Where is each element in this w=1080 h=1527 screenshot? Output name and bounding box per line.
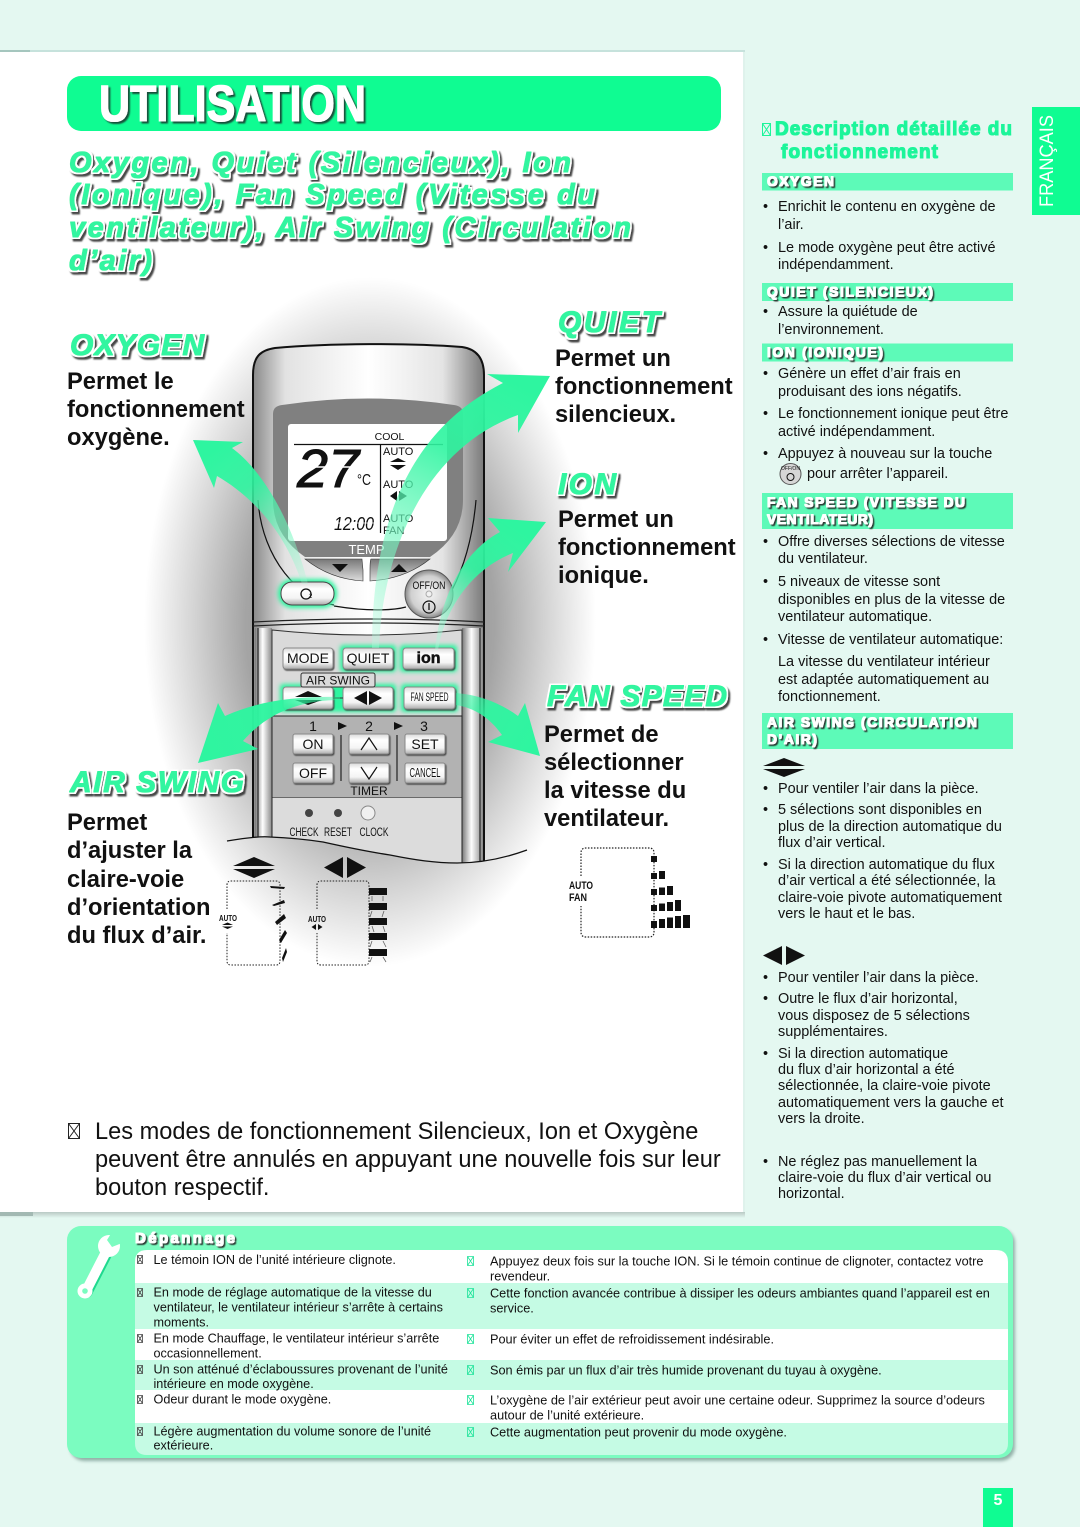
section: ion: Génère un effet d’air frais en <box>778 366 961 382</box>
timer panel: CANCEL <box>410 766 441 780</box>
heading: detailed description <box>762 119 1012 163</box>
text: oxygen description <box>67 369 245 451</box>
section: fan speed <box>762 493 1013 705</box>
section: oxygen: indépendamment. <box>778 257 894 273</box>
remote control illustration: FAN SPEED <box>410 690 449 704</box>
heading: feature list: ventilateur), Air Swing (Circulation <box>69 212 631 244</box>
note: cancel modes: peuvent être annulés en appuyant une nouvelle fois sur leur <box>95 1147 721 1173</box>
section: air swing: • <box>763 1154 768 1170</box>
section: ion: activé indépendamment. <box>778 424 935 440</box>
lower remote panel: RESET <box>324 827 352 839</box>
markers <box>138 1256 142 1436</box>
icon: fan speed diagram <box>569 848 690 937</box>
section: oxygen: Enrichit le contenu en oxygène de <box>778 199 996 215</box>
section: air swing: supplémentaires. <box>778 1024 888 1040</box>
heading: quiet: QUIET <box>558 306 663 339</box>
icon: off/on button: OFF/ON <box>781 466 800 472</box>
heading: feature list: (Ionique), Fan Speed (Vitesse du <box>69 179 595 211</box>
remote display: 27 <box>296 439 361 499</box>
temperature buttons <box>305 559 430 581</box>
note: cancel modes: Les modes de fonctionnement Silencieux, Ion et Oxygène <box>95 1119 698 1145</box>
section: quiet: l’environnement. <box>778 322 884 338</box>
heading: detailed description: fonctionnement <box>781 142 939 163</box>
icon: vertical swing diagram: AUTO <box>219 913 237 923</box>
title banner <box>67 75 721 132</box>
section: fan speed: fonctionnement. <box>778 689 881 705</box>
troubleshooting explanations <box>490 1254 990 1440</box>
timer panel <box>272 716 462 798</box>
section: oxygen: • <box>763 240 768 256</box>
arrow: fan speed <box>456 693 540 756</box>
section: air swing: du flux d’air horizontal a été <box>778 1062 955 1078</box>
remote display: TEMP <box>348 542 385 557</box>
troubleshooting symptoms <box>154 1253 448 1452</box>
text: fan speed description: la vitesse du <box>544 778 686 804</box>
section: air swing: flux d’air vertical. <box>778 835 886 851</box>
text: quiet description: silencieux. <box>555 402 676 428</box>
timer panel: 3 <box>420 718 428 734</box>
function buttons <box>283 648 455 709</box>
section: fan speed: • <box>763 632 768 648</box>
section: ion: Le fonctionnement ionique peut être <box>778 406 1008 422</box>
section: ion: • <box>763 446 768 462</box>
section: quiet <box>762 283 1013 338</box>
page number <box>983 1488 1013 1527</box>
heading: oxygen: OXYGEN <box>70 329 205 362</box>
remote display: °C <box>357 472 371 489</box>
heading: troubleshooting: Dépannage <box>135 1230 235 1247</box>
remote display: COOL <box>375 431 405 443</box>
section: air swing: Si la direction automatique <box>778 1046 948 1062</box>
section: air swing: plus de la direction automatique du <box>778 819 1002 835</box>
section: fan speed: Vitesse de ventilateur automatique: <box>778 632 1003 648</box>
section: fan speed: du ventilateur. <box>778 551 868 567</box>
icon: wrench <box>78 1232 122 1298</box>
remote control illustration: MODE <box>287 650 329 666</box>
troubleshooting symptoms: Odeur durant le mode oxygène. <box>154 1392 331 1406</box>
text: oxygen description: fonctionnement <box>67 397 245 423</box>
troubleshooting explanations: Son émis par un flux d’air très humide provenant du tuyau à oxygène. <box>490 1362 882 1378</box>
section: fan speed: FAN SPEED (VITESSE DU <box>767 495 965 510</box>
section: air swing: AIR SWING (CIRCULATION <box>767 715 977 730</box>
section: air swing: claire-voie pivote automatiquement <box>778 890 1002 906</box>
markers <box>468 1256 474 1436</box>
text: air swing description: Permet <box>67 810 147 836</box>
panel: main white sheet <box>0 50 745 1218</box>
section: fan speed: La vitesse du ventilateur intérieur <box>778 654 990 670</box>
section: quiet: Assure la quiétude de <box>778 304 918 320</box>
troubleshooting rows <box>135 1250 1008 1455</box>
arrow: oxygen <box>193 440 308 584</box>
section: air swing: Outre le flux d’air horizontal, <box>778 991 958 1007</box>
timer panel: 2 <box>365 718 373 734</box>
timer panel: 1 <box>309 718 317 734</box>
lower remote panel: CLOCK <box>360 827 389 839</box>
text: oxygen description: Permet le <box>67 369 174 395</box>
panel: troubleshooting <box>67 1226 1015 1461</box>
troubleshooting symptoms: Le témoin ION de l’unité intérieure clignote. <box>154 1253 396 1267</box>
arrow: quiet <box>372 374 550 648</box>
section: ion: • <box>763 406 768 422</box>
section: ion: produisant des ions négatifs. <box>778 384 962 400</box>
remote display: AUTO <box>383 513 414 525</box>
remote display: FAN <box>383 525 404 537</box>
text: oxygen description: oxygène. <box>67 425 170 451</box>
section: quiet: • <box>763 304 768 320</box>
timer panel: TIMER <box>350 784 388 798</box>
off/on button <box>405 570 453 618</box>
section: ion: Appuyez à nouveau sur la touche <box>778 446 992 462</box>
section: fan speed: Offre diverses sélections de vitesse <box>778 534 1005 550</box>
troubleshooting explanations: autour de l’unité extérieure. <box>490 1408 644 1422</box>
language tab <box>1032 107 1080 215</box>
section: fan speed: • <box>763 574 768 590</box>
section: air swing: horizontal. <box>778 1186 845 1202</box>
troubleshooting symptoms: En mode de réglage automatique de la vitesse du <box>154 1286 432 1300</box>
section: oxygen: • <box>763 199 768 215</box>
upper button panel <box>272 630 462 716</box>
section: oxygen: OXYGEN <box>767 174 834 189</box>
remote control illustration: ion <box>416 650 440 667</box>
text: fan speed description: Permet de <box>544 722 659 748</box>
section: air swing: • <box>763 857 768 873</box>
oxygen button: 2 <box>309 594 313 600</box>
troubleshooting explanations: Cette augmentation peut provenir du mode oxygène. <box>490 1424 787 1440</box>
troubleshooting symptoms: Un son atténué d’éclaboussures provenant de l’unité <box>154 1362 448 1376</box>
section: air swing: vous disposez de 5 sélections <box>778 1008 970 1024</box>
remote body <box>253 344 484 870</box>
remote control illustration <box>227 344 527 873</box>
section: air swing: • <box>763 970 768 986</box>
section: air swing: sélectionnée, la claire-voie pivote <box>778 1078 991 1094</box>
section: air swing: Si la direction automatique du flux <box>778 857 995 873</box>
section: fan speed: ventilateur automatique. <box>778 609 932 625</box>
heading: feature list: d’air) <box>69 245 152 277</box>
troubleshooting symptoms: occasionnellement. <box>154 1346 262 1360</box>
section: air swing: automatiquement vers la gauche et <box>778 1095 1004 1111</box>
icon: off/on button <box>780 464 801 484</box>
section: oxygen: Le mode oxygène peut être activé <box>778 240 996 256</box>
text: air swing description: claire-voie <box>67 867 184 893</box>
icon: fan speed diagram: AUTO <box>569 880 593 892</box>
icon: horizontal swing diagram <box>308 857 387 965</box>
section: air swing: • <box>763 802 768 818</box>
section: air swing: 5 sélections sont disponibles en <box>778 802 982 818</box>
troubleshooting explanations: L’oxygène de l’air extérieur peut avoir une certaine odeur. Supprimez la source d’odeurs <box>490 1392 985 1408</box>
section: air swing: vers la droite. <box>778 1111 865 1127</box>
arrow: air swing <box>198 697 340 763</box>
section: ion <box>762 344 1013 484</box>
text: ion description: fonctionnement <box>558 535 736 561</box>
section: ion: pour arrêter l’appareil. <box>807 466 948 482</box>
heading: detailed description: Description détaillée du <box>775 119 1012 140</box>
section: air swing: Pour ventiler l’air dans la pièce. <box>778 781 979 797</box>
section: ion: ION (IONIQUE) <box>767 345 883 360</box>
language tab: FRANÇAIS <box>1037 115 1058 207</box>
troubleshooting explanations: Appuyez deux fois sur la touche ION. Si le témoin continue de clignoter, contactez votre <box>490 1254 983 1268</box>
troubleshooting symptoms: En mode Chauffage, le ventilateur intérieur s’arrête <box>154 1332 439 1346</box>
heading: feature list: Oxygen, Quiet (Silencieux), Ion <box>69 147 571 179</box>
section: fan speed: disponibles en plus de la vitesse de <box>778 592 1005 608</box>
section: air swing: • <box>763 781 768 797</box>
heading: feature list <box>69 147 631 277</box>
remote display <box>273 398 463 557</box>
lower remote panel <box>272 798 462 862</box>
text: quiet description: Permet un <box>555 346 671 372</box>
section: air swing: claire-voie du flux d’air vertical ou <box>778 1170 991 1186</box>
timer panel: ON <box>302 736 324 752</box>
grey halo behind remote <box>144 277 596 967</box>
text: fan speed description: ventilateur. <box>544 806 669 832</box>
off/on button: OFF/ON <box>412 580 446 592</box>
text: fan speed description: sélectionner <box>544 750 684 776</box>
troubleshooting explanations: revendeur. <box>490 1268 550 1284</box>
troubleshooting symptoms: moments. <box>154 1316 209 1330</box>
text: air swing description: du flux d’air. <box>67 923 207 949</box>
section: quiet: QUIET (SILENCIEUX) <box>767 284 933 300</box>
section: air swing: • <box>763 1046 768 1062</box>
arrow: ion <box>435 518 546 650</box>
remote display: AUTO <box>383 479 414 491</box>
text: ion description: Permet un <box>558 507 674 533</box>
section: fan speed: 5 niveaux de vitesse sont <box>778 574 940 590</box>
section: oxygen <box>762 173 1013 273</box>
text: air swing description: d’ajuster la <box>67 838 193 864</box>
remote display: 12:00 <box>334 514 374 534</box>
heading: air swing: AIR SWING <box>69 766 244 799</box>
troubleshooting explanations: service. <box>490 1300 534 1316</box>
section: air swing <box>762 713 1013 1202</box>
section: fan speed: est adaptée automatiquement au <box>778 672 989 688</box>
oxygen button <box>278 579 337 608</box>
text: quiet description <box>555 346 733 428</box>
text: quiet description: fonctionnement <box>555 374 733 400</box>
section: fan speed: • <box>763 534 768 550</box>
text: air swing description: d’orientation <box>67 895 210 921</box>
timer panel: OFF <box>299 765 327 781</box>
text: ion description: ionique. <box>558 563 649 589</box>
troubleshooting explanations: Cette fonction avancée contribue à dissiper les odeurs ambiantes quand l’appareil est en <box>490 1286 990 1300</box>
icon: vertical swing diagram <box>219 857 287 965</box>
title banner: UTILISATION <box>99 75 366 132</box>
troubleshooting symptoms: ventilateur, le ventilateur intérieur s’arrête à certains <box>154 1300 443 1314</box>
section: air swing: • <box>763 991 768 1007</box>
section: air swing: D’AIR) <box>767 732 817 747</box>
troubleshooting symptoms: Légère augmentation du volume sonore de l’unité <box>154 1424 431 1438</box>
heading: ion: ION <box>558 468 617 501</box>
page number: 5 <box>994 1492 1003 1509</box>
note: cancel modes <box>68 1119 721 1201</box>
lower remote panel: CHECK <box>290 827 319 839</box>
troubleshooting symptoms: intérieure en mode oxygène. <box>154 1377 314 1391</box>
troubleshooting symptoms: extérieure. <box>154 1438 213 1452</box>
section: fan speed: VENTILATEUR) <box>767 512 873 527</box>
remote control illustration: QUIET <box>347 650 390 666</box>
section: air swing: Ne réglez pas manuellement la <box>778 1154 978 1170</box>
section: oxygen: l’air. <box>778 217 804 233</box>
section: air swing: vers le haut et le bas. <box>778 906 915 922</box>
air swing label: AIR SWING <box>306 674 370 688</box>
heading: fan speed: FAN SPEED <box>547 680 727 713</box>
troubleshooting explanations: Pour éviter un effet de refroidissement indésirable. <box>490 1332 774 1346</box>
text: ion description <box>558 507 736 589</box>
section: air swing: Pour ventiler l’air dans la pièce. <box>778 970 979 986</box>
text: air swing description <box>67 810 210 949</box>
icon: vertical swing <box>763 758 805 777</box>
section: air swing: d’air vertical a été sélectionnée, la <box>778 873 996 889</box>
text: fan speed description <box>544 722 686 832</box>
remote display: AUTO <box>383 446 414 458</box>
icon: horizontal swing <box>763 946 805 965</box>
timer panel: SET <box>411 736 439 752</box>
icon: horizontal swing diagram: AUTO <box>308 914 326 924</box>
note: cancel modes: bouton respectif. <box>95 1175 269 1201</box>
icon: fan speed diagram: FAN <box>569 892 587 904</box>
glow: active buttons <box>280 645 458 712</box>
section: ion: • <box>763 366 768 382</box>
